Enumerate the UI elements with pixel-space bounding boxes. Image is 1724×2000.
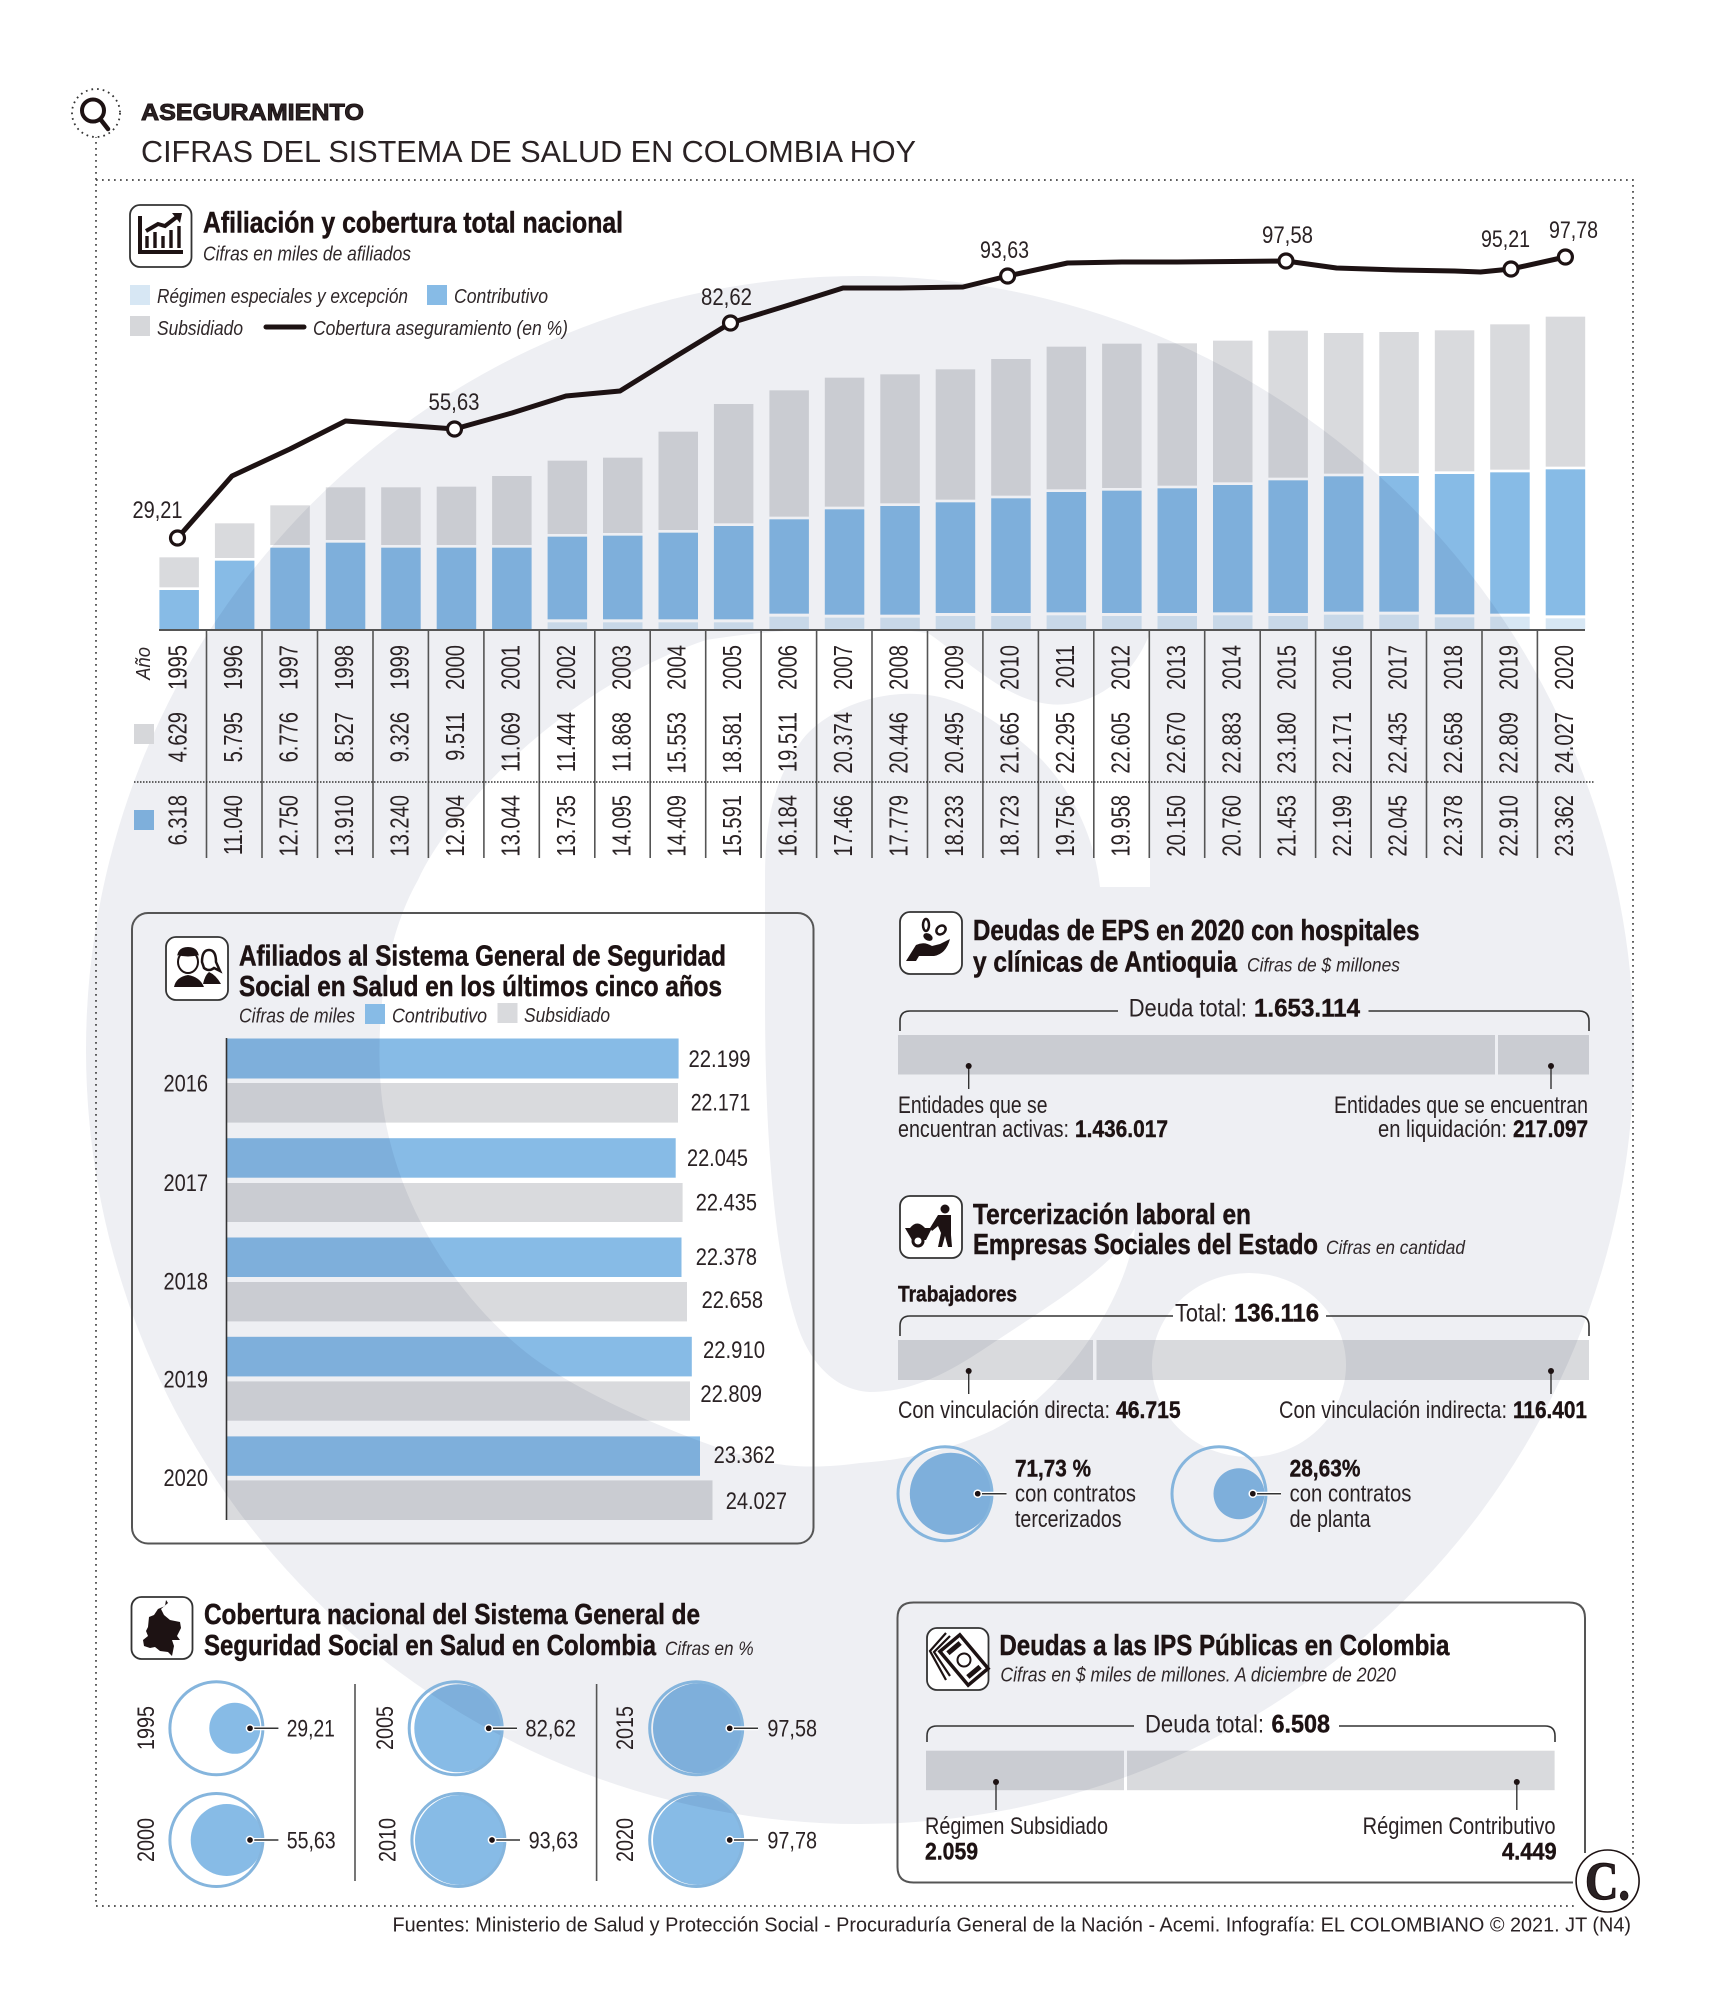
line chart: cobertura aseguramiento: 29,21 (132, 497, 182, 524)
data table under the bars: 2009 (940, 645, 969, 690)
labels: en liquidación: (1378, 1116, 1507, 1143)
data table under the bars: 1998 (330, 645, 359, 690)
panel: afiliación y cobertura total nacional (130, 205, 1598, 858)
data table under the bars: 2010 (995, 645, 1024, 690)
circle charts: 2015 (612, 1706, 639, 1750)
horizontal bar chart: 22.378 (696, 1244, 757, 1271)
logo: El Colombiano C: C. (1585, 1851, 1630, 1911)
horizontal bar chart: 23.362 (714, 1442, 775, 1469)
panel: cobertura nacional: Seguridad Social en Salud en Colombia (204, 1630, 657, 1662)
line chart: cobertura aseguramiento: 97,78 (1549, 217, 1598, 244)
labels: Entidades que se encuentran (1334, 1092, 1588, 1119)
data table under the bars: 2011 (1050, 645, 1079, 688)
data table under the bars: 23.362 (1550, 795, 1579, 857)
data table under the bars: 17.779 (884, 795, 913, 857)
bracket and total (900, 1300, 1589, 1336)
data table under the bars: 20.760 (1217, 795, 1246, 857)
circle chart: 71,73 %: con contratos (1015, 1481, 1136, 1508)
icon: worker with wheelbarrow (900, 1196, 962, 1258)
horizontal bar chart: 2019 (164, 1366, 208, 1394)
circle charts (133, 1682, 817, 1886)
data table under the bars: 22.605 (1106, 712, 1135, 774)
data table under the bars: 2017 (1383, 645, 1412, 690)
labels: encuentran activas: (898, 1116, 1069, 1143)
circle chart: 28,63 % (1172, 1447, 1411, 1541)
legend: Contributivo (392, 1006, 487, 1028)
heading: section kicker: ASEGURAMIENTO (141, 99, 364, 125)
data table under the bars: 18.581 (718, 712, 747, 774)
data table under the bars: 19.511 (773, 712, 802, 772)
horizontal bar chart: 24.027 (726, 1488, 787, 1515)
circle chart: 28,63 %: de planta (1290, 1506, 1371, 1533)
data table under the bars: 12.750 (274, 795, 303, 857)
data table under the bars: 22.670 (1161, 712, 1190, 774)
line chart: cobertura aseguramiento: 95,21 (1481, 226, 1530, 253)
legend (130, 285, 568, 340)
data table under the bars: 11.040 (219, 795, 248, 855)
labels: Con vinculación indirecta: (1279, 1397, 1507, 1424)
data table under the bars: 20.150 (1161, 795, 1190, 857)
data table under the bars: 2008 (884, 645, 913, 690)
data table under the bars: 2016 (1328, 645, 1357, 690)
circle charts: 97,58 (767, 1716, 817, 1743)
label: trabajadores: Trabajadores (898, 1282, 1017, 1306)
data table under the bars: 2002 (551, 645, 580, 690)
split bar (926, 1751, 1555, 1810)
circle charts: 29,21 (287, 1716, 335, 1743)
data table under the bars: 20.495 (940, 712, 969, 774)
subtitle: Cifras de $ millones (1247, 956, 1400, 976)
data table under the bars: 15.591 (718, 795, 747, 857)
data table under the bars: 9.326 (385, 712, 414, 762)
bracket and total: 6.508 (1272, 1711, 1330, 1739)
horizontal bar chart: 2020 (164, 1465, 208, 1492)
stacked bar chart (159, 317, 1585, 629)
data table under the bars: 2012 (1106, 645, 1135, 690)
labels: 1.436.017 (1075, 1116, 1168, 1143)
labels: 2.059 (925, 1838, 978, 1865)
dividers (355, 1684, 597, 1881)
icon: growth chart (130, 205, 192, 267)
data table under the bars: 22.883 (1217, 712, 1246, 774)
footer: sources: Fuentes: Ministerio de Salud y Protección Social - Procuraduría General de la Nación - Acemi. Infografía: EL COLOMBIANO © 2021. JT (N4) (392, 1914, 1631, 1936)
line chart: cobertura aseguramiento (132, 217, 1598, 545)
bracket and total: Deuda total: (1145, 1711, 1264, 1739)
circle chart: 28,63 %: 28,63% (1290, 1456, 1360, 1483)
bracket and total: Deuda total: (1129, 995, 1247, 1023)
circle chart: 28,63 %: con contratos (1290, 1481, 1411, 1508)
data table under the bars: 6.318 (163, 795, 192, 845)
data table under the bars: 1999 (385, 645, 414, 690)
legend: Subsidiado (524, 1005, 610, 1027)
horizontal bar chart: 22.171 (691, 1090, 750, 1117)
data table under the bars: 18.723 (995, 795, 1024, 857)
labels: Entidades que se (898, 1092, 1048, 1119)
circle charts: 93,63 (529, 1828, 578, 1854)
panel: cobertura nacional (132, 1597, 817, 1886)
data table under the bars: 22.910 (1494, 795, 1523, 857)
legend (239, 1003, 610, 1028)
data table under the bars: 8.527 (330, 712, 359, 762)
heading: Tercerización laboral en (973, 1199, 1251, 1231)
data table under the bars: 13.240 (385, 795, 414, 857)
labels: 4.449 (1502, 1838, 1557, 1865)
data table under the bars: 2000 (440, 645, 469, 690)
data table under the bars: 2005 (718, 645, 747, 690)
data table under the bars: 20.374 (829, 712, 858, 774)
data table under the bars: 2018 (1439, 645, 1468, 690)
data table under the bars: 14.095 (607, 795, 636, 857)
data table under the bars: 19.756 (1050, 795, 1079, 857)
icon: people (166, 937, 228, 1000)
horizontal bar chart: 2016 (164, 1070, 208, 1098)
labels: Régimen Contributivo (1363, 1813, 1556, 1840)
heading: Cobertura nacional del Sistema General de (204, 1599, 700, 1631)
line chart: cobertura aseguramiento: 97,58 (1262, 222, 1313, 249)
circle charts: 2005 (372, 1706, 399, 1750)
heading: Deudas a las IPS Públicas en Colombia (999, 1630, 1450, 1662)
data table under the bars: 6.776 (274, 712, 303, 762)
circle charts: 82,62 (525, 1716, 576, 1743)
data table under the bars: 9.511 (440, 712, 469, 761)
legend: Cifras de miles (239, 1006, 355, 1028)
labels: Con vinculación directa: (898, 1397, 1110, 1424)
panel: deudas a las IPS públicas (898, 1602, 1585, 1882)
circle charts: 1995 (133, 1706, 160, 1750)
horizontal bar chart: 22.435 (696, 1190, 757, 1217)
horizontal bar chart: 22.910 (703, 1337, 765, 1364)
data table under the bars: 23.180 (1272, 712, 1301, 774)
panel: deudas de EPS: y clínicas de Antioquia (973, 946, 1238, 978)
dotted frame (96, 136, 1633, 1906)
horizontal bar chart: 22.045 (687, 1145, 748, 1172)
circle charts: 55,63 (287, 1828, 336, 1854)
legend: Subsidiado (157, 318, 243, 340)
data table under the bars: 22.435 (1383, 712, 1412, 774)
bracket and total (927, 1711, 1555, 1742)
data table under the bars: 19.958 (1106, 795, 1135, 857)
horizontal bar chart: 2018 (164, 1268, 208, 1296)
title: CIFRAS DEL SISTEMA DE SALUD EN COLOMBIA HOY (141, 135, 916, 169)
horizontal bar chart: 22.658 (702, 1287, 763, 1314)
data table under the bars: 22.199 (1328, 795, 1357, 857)
subtitle: Cifras en $ miles de millones. A diciembre de 2020 (1000, 1664, 1396, 1686)
data table under the bars: 2019 (1494, 645, 1523, 690)
icon: hand with coins (900, 912, 962, 974)
data table under the bars: 18.233 (940, 795, 969, 857)
split bar (898, 1035, 1589, 1089)
heading: Afiliados al Sistema General de Seguridad (239, 940, 726, 972)
labels: 217.097 (1513, 1116, 1588, 1143)
line chart: cobertura aseguramiento: 55,63 (428, 389, 480, 416)
subtitle: Cifras en miles de afiliados (203, 244, 411, 266)
legend: Cobertura aseguramiento (en %) (313, 318, 568, 340)
data table under the bars: 16.184 (773, 795, 802, 857)
legend: Contributivo (454, 286, 548, 308)
data table under the bars: 22.378 (1439, 795, 1468, 857)
data table under the bars: 11.069 (496, 712, 525, 772)
circle chart: 71,73 %: tercerizados (1015, 1506, 1122, 1533)
data table under the bars: 5.795 (219, 712, 248, 762)
panel: afiliados últimos cinco años: Social en Salud en los últimos cinco años (239, 971, 722, 1003)
data table under the bars: 20.446 (884, 712, 913, 774)
data table under the bars: 2014 (1217, 645, 1246, 690)
data table under the bars: 1995 (163, 645, 192, 690)
circle chart: 71,73 % (898, 1447, 1136, 1541)
data table under the bars: 24.027 (1550, 712, 1579, 774)
data table under the bars: 2003 (607, 645, 636, 690)
background: large grey C logo watermark (86, 276, 1634, 1824)
data table under the bars: 2013 (1161, 645, 1190, 690)
split bar (898, 1340, 1589, 1394)
data table under the bars: 22.045 (1383, 795, 1412, 857)
data table under the bars: 13.910 (330, 795, 359, 857)
icon: magnifying glass (72, 89, 120, 137)
data table under the bars: 2004 (662, 645, 691, 690)
panel: deudas de EPS (898, 912, 1589, 1143)
bracket and total: 1.653.114 (1254, 995, 1360, 1023)
panel: tercerización laboral (898, 1196, 1589, 1541)
data table under the bars: 21.453 (1272, 795, 1301, 857)
data table under the bars: 13.044 (496, 795, 525, 857)
data table under the bars: 22.295 (1050, 712, 1079, 774)
bracket and total (900, 995, 1589, 1031)
labels: 46.715 (1116, 1397, 1181, 1424)
data table under the bars: 4.629 (163, 712, 192, 762)
circle charts: 2000 (133, 1818, 160, 1862)
circle chart: 71,73 %: 71,73 % (1015, 1456, 1091, 1483)
circle charts: 2010 (374, 1818, 402, 1862)
data table under the bars: 13.735 (551, 795, 580, 857)
data table under the bars: 1996 (219, 645, 248, 690)
data table under the bars: 22.658 (1439, 712, 1468, 774)
panel: afiliados últimos cinco años (132, 913, 814, 1544)
subtitle: Cifras en cantidad (1326, 1238, 1466, 1259)
data table under the bars: 17.466 (829, 795, 858, 857)
labels: Régimen Subsidiado (925, 1813, 1108, 1840)
data table under the bars: 2006 (773, 645, 802, 690)
data table under the bars: 2020 (1550, 645, 1579, 690)
data table under the bars: 2007 (829, 645, 858, 690)
data table under the bars: 11.444 (551, 712, 580, 772)
line chart: cobertura aseguramiento: 93,63 (980, 237, 1029, 264)
data table under the bars: 22.171 (1328, 712, 1357, 774)
labels: 116.401 (1513, 1397, 1587, 1424)
icon: map of Colombia (132, 1597, 192, 1659)
bracket and total: 136.116 (1234, 1300, 1319, 1328)
horizontal bar chart (164, 1038, 787, 1520)
data table under the bars: 21.665 (995, 712, 1024, 774)
data table under the bars: 11.868 (607, 712, 636, 772)
line chart: cobertura aseguramiento: 82,62 (701, 284, 752, 311)
data table under the bars: Año (133, 647, 155, 681)
data table under the bars: 1997 (274, 645, 303, 690)
subtitle: Cifras en % (665, 1639, 754, 1660)
labels (898, 1397, 1587, 1424)
heading: Deudas de EPS en 2020 con hospitales (973, 915, 1420, 947)
legend: Régimen especiales y excepción (157, 286, 408, 308)
horizontal bar chart: 2017 (164, 1170, 208, 1197)
icon: banknotes (927, 1628, 988, 1690)
data table under the bars (133, 630, 1595, 858)
data table under the bars: 22.809 (1494, 712, 1523, 774)
data table under the bars: 2001 (496, 645, 525, 690)
circle charts: 97,78 (767, 1828, 817, 1854)
heading: Afiliación y cobertura total nacional (203, 206, 623, 240)
horizontal bar chart: 22.809 (700, 1381, 762, 1408)
data table under the bars: 2015 (1272, 645, 1301, 690)
bracket and total: Total: (1175, 1300, 1227, 1328)
data table under the bars: 15.553 (662, 712, 691, 774)
labels (925, 1813, 1557, 1865)
labels (898, 1092, 1588, 1143)
horizontal bar chart: 22.199 (688, 1046, 750, 1073)
data table under the bars: 14.409 (662, 795, 691, 857)
data table under the bars: 12.904 (440, 795, 469, 857)
panel: tercerización laboral: Empresas Sociales del Estado (973, 1229, 1318, 1261)
circle charts: 2020 (612, 1818, 639, 1862)
